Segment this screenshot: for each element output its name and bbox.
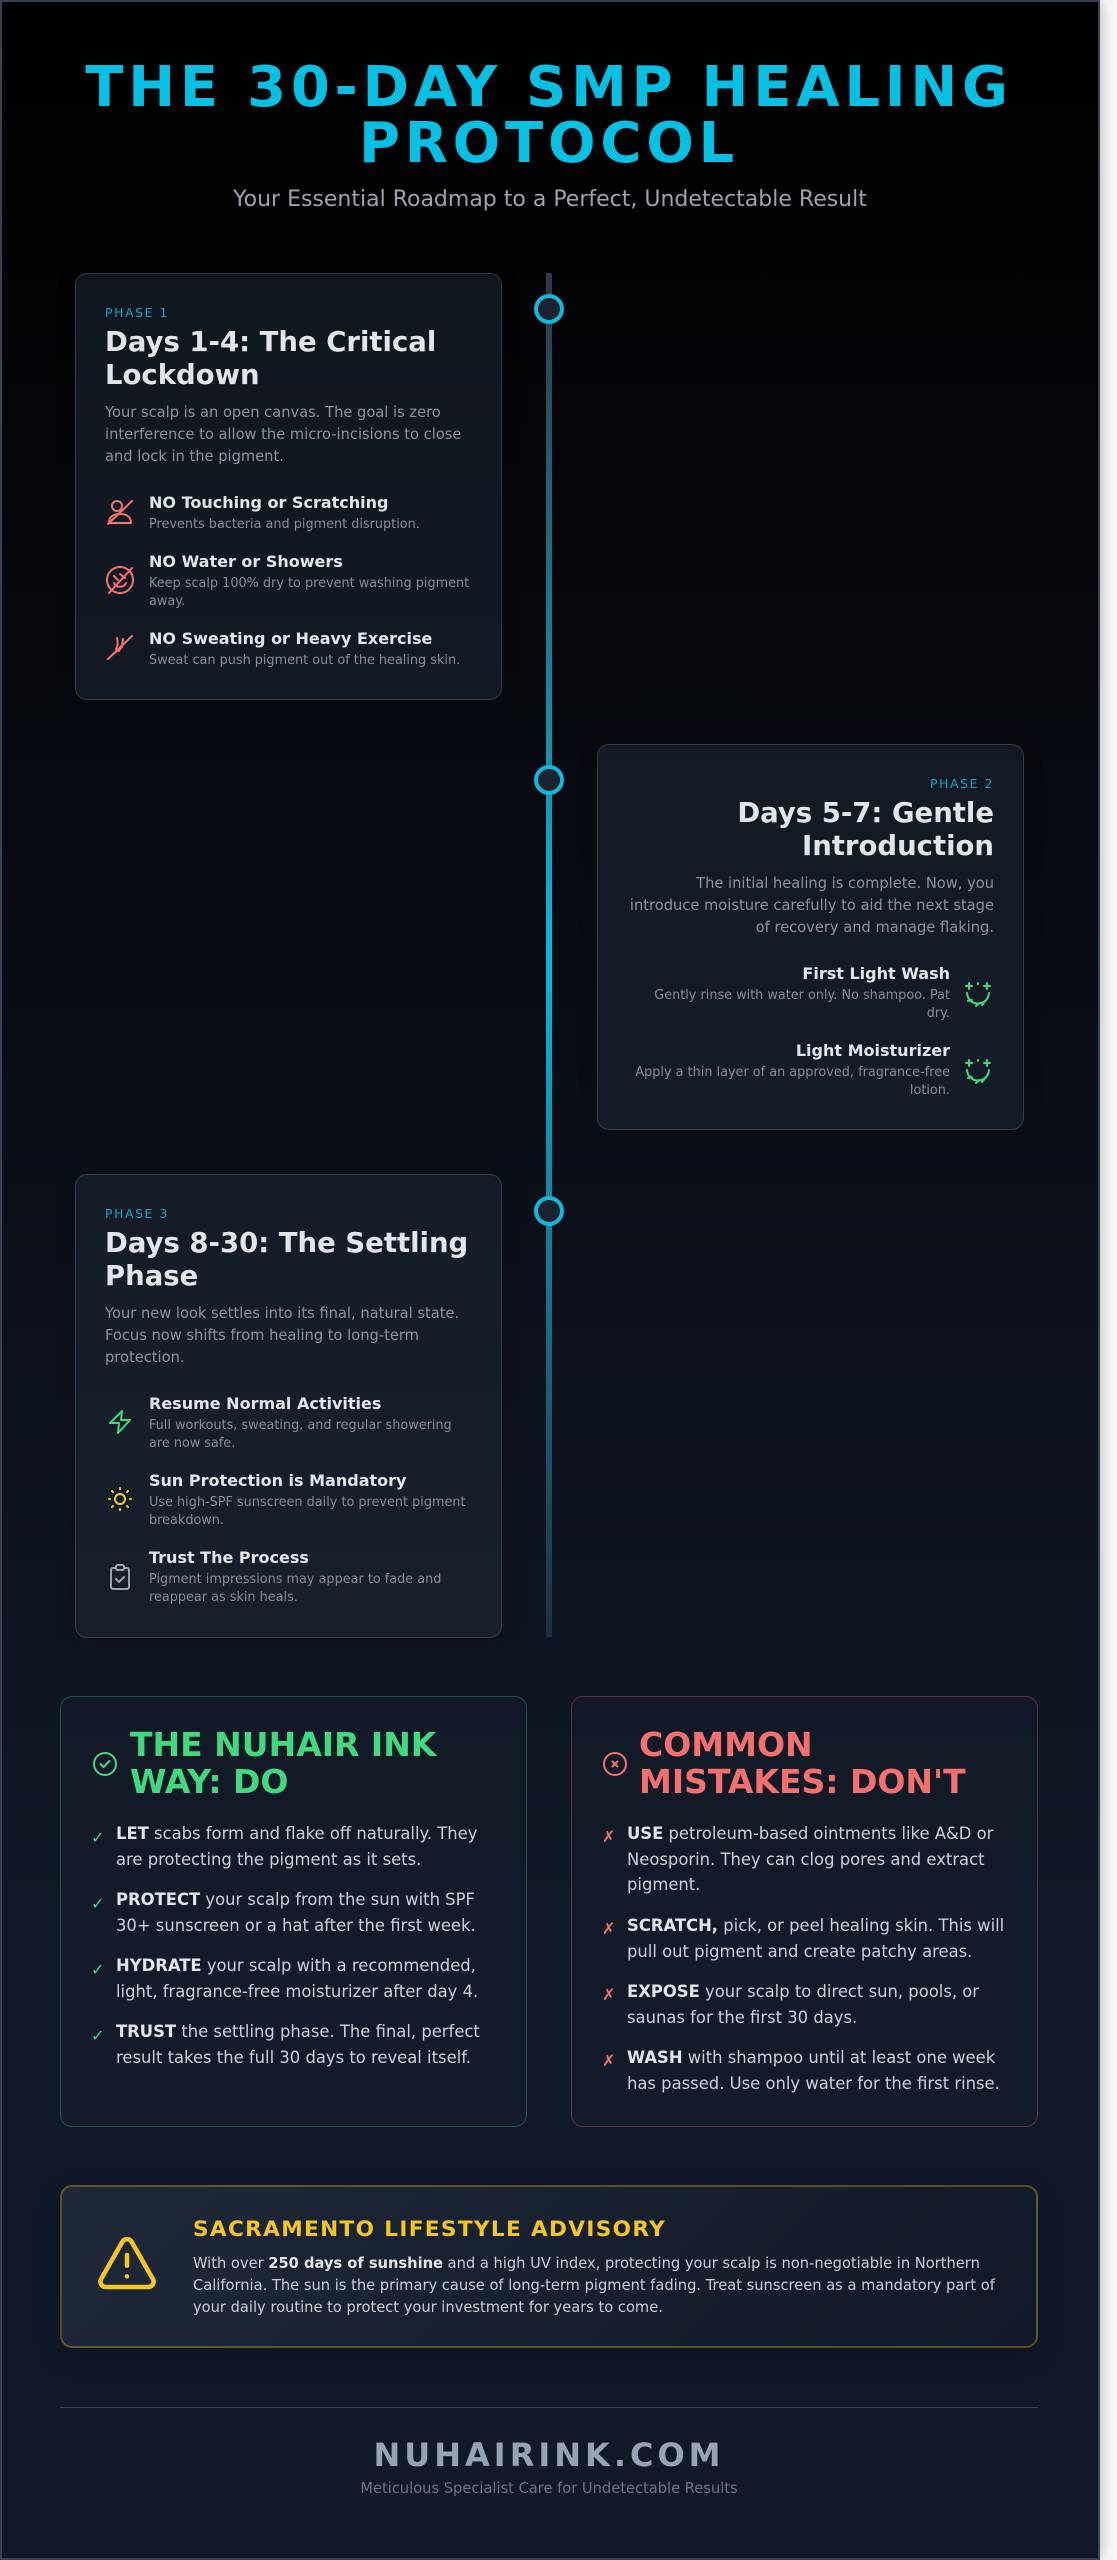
- don't item 1: USE petroleum-based ointments like A&D or: [627, 1824, 993, 1843]
- panel: phase 2: [597, 744, 1024, 1130]
- icon: x circle: [603, 1752, 627, 1776]
- do heading: [130, 1725, 438, 1801]
- item: no water: NO Water or Showers: [149, 552, 343, 571]
- phase 2 label: PHASE 2: [930, 776, 994, 791]
- do item 3: [116, 1956, 478, 2001]
- item: trust the process: Pigment impressions may appear to fade and: [149, 1572, 441, 1587]
- item: first light wash: First Light Wash: [802, 964, 950, 983]
- phase 2 heading: [737, 797, 994, 862]
- don't item 2: SCRATCH, pick, or peel healing skin. This will: [627, 1916, 1004, 1935]
- icon: clipboard check: [110, 1564, 130, 1590]
- phase 1 heading: [105, 326, 436, 391]
- item: no touching: Prevents bacteria and pigment disruption.: [149, 517, 420, 532]
- icon: no sweating: [107, 635, 133, 660]
- don't item 1: [627, 1824, 994, 1894]
- phase 1 heading: Days 1-4: The Critical: [105, 326, 436, 358]
- icon: check circle: [93, 1752, 117, 1776]
- phase 1 description: and lock in the pigment.: [105, 448, 284, 465]
- item: resume activities: are now safe.: [149, 1436, 235, 1451]
- don't cross 2: ✗: [602, 1919, 615, 1938]
- phase 3 description: Focus now shifts from healing to long-term: [105, 1327, 419, 1344]
- don't item 4: [627, 2048, 1000, 2093]
- do item 3: light, fragrance-free moisturizer after day 4.: [116, 1982, 478, 2001]
- do check 3: ✓: [91, 1960, 104, 1979]
- do item 1: are protecting the pigment as it sets.: [116, 1850, 421, 1869]
- title: PROTOCOL: [359, 111, 739, 176]
- title: THE 30-DAY SMP HEALING: [85, 55, 1013, 120]
- item: light moisturizer: lotion.: [910, 1083, 950, 1098]
- do item 4: [116, 2022, 480, 2067]
- icon: warning triangle: [98, 2236, 156, 2290]
- do heading: WAY: DO: [130, 1762, 288, 1801]
- item: no water: away.: [149, 594, 185, 609]
- do item 1: [116, 1824, 477, 1869]
- don't item 1: Neosporin. They can clog pores and extract: [627, 1850, 985, 1869]
- title: [85, 55, 1013, 176]
- advisory body: With over 250 days of sunshine and a high UV index, protecting your scalp is non-negotiable in Northern: [193, 2255, 980, 2272]
- don't item 2: [627, 1916, 1004, 1961]
- don't item 3: [627, 1982, 979, 2027]
- item: no sweating: [149, 629, 460, 668]
- subtitle: Your Essential Roadmap to a Perfect, Undetectable Result: [233, 187, 867, 212]
- item: sun protection: [149, 1471, 466, 1528]
- item: first light wash: dry.: [927, 1006, 950, 1021]
- panel: do list: [60, 1696, 527, 2127]
- do item 4: result takes the full 30 days to reveal itself.: [116, 2048, 471, 2067]
- do item 4: TRUST the settling phase. The final, perfect: [116, 2022, 480, 2041]
- item: no touching: NO Touching or Scratching: [149, 493, 389, 512]
- footer divider: [60, 2407, 1038, 2408]
- don't item 2: pull out pigment and create patchy areas.: [627, 1942, 972, 1961]
- don't item 3: saunas for the first 30 days.: [627, 2008, 857, 2027]
- timeline node 3: [534, 1196, 564, 1226]
- phase 3 heading: Phase: [105, 1260, 198, 1292]
- don't heading: [639, 1725, 966, 1801]
- do check 2: ✓: [91, 1894, 104, 1913]
- phase 2 description: of recovery and manage flaking.: [756, 919, 994, 936]
- don't item 1: pigment.: [627, 1875, 700, 1894]
- advisory body: California. The sun is the primary cause of long-term pigment fading. Treat sunscreen as a mandatory part of: [193, 2277, 995, 2294]
- don't cross 3: ✗: [602, 1985, 615, 2004]
- do heading: THE NUHAIR INK: [130, 1725, 436, 1764]
- item: no water: Keep scalp 100% dry to prevent washing pigment: [149, 576, 469, 591]
- do item 3: HYDRATE your scalp with a recommended,: [116, 1956, 476, 1975]
- phase 1 description: Your scalp is an open canvas. The goal is zero: [105, 404, 441, 421]
- do item 1: LET scabs form and flake off naturally. They: [116, 1824, 477, 1843]
- phase 1 description: [105, 404, 461, 465]
- phase 3 description: Your new look settles into its final, natural state.: [105, 1305, 459, 1322]
- do item 2: PROTECT your scalp from the sun with SPF: [116, 1890, 475, 1909]
- icon: sparkle smile 1: [965, 982, 991, 1007]
- item: trust the process: [149, 1548, 441, 1605]
- phase 3 description: protection.: [105, 1349, 185, 1366]
- panel: phase 1: [75, 273, 502, 700]
- icon: sparkle smile 2: [965, 1059, 991, 1084]
- item: resume activities: Resume Normal Activities: [149, 1394, 381, 1413]
- item: trust the process: reappear as skin heals.: [149, 1590, 298, 1605]
- item: no touching: [149, 493, 420, 532]
- icon: no water: [106, 566, 134, 594]
- don't item 4: WASH with shampoo until at least one week: [627, 2048, 995, 2067]
- phase 2 heading: Days 5-7: Gentle: [737, 797, 994, 829]
- footer brand: NUHAIRINK.COM: [373, 2436, 725, 2474]
- timeline line: [546, 273, 552, 1637]
- phase 1 description: interference to allow the micro-incisions to close: [105, 426, 461, 443]
- phase 3 description: [105, 1305, 459, 1366]
- item: light moisturizer: Apply a thin layer of an approved, fragrance-free: [635, 1065, 950, 1080]
- icon: no touching: [107, 500, 133, 525]
- item: sun protection: Use high-SPF sunscreen daily to prevent pigment: [149, 1495, 466, 1510]
- item: sun protection: Sun Protection is Mandatory: [149, 1471, 406, 1490]
- item: no sweating: NO Sweating or Heavy Exercise: [149, 629, 432, 648]
- do check 1: ✓: [91, 1828, 104, 1847]
- phase 3 label: PHASE 3: [105, 1206, 169, 1221]
- advisory body: [193, 2255, 996, 2316]
- item: light moisturizer: [635, 1041, 950, 1098]
- icon: sun: [108, 1487, 132, 1511]
- phase 2 description: [630, 875, 994, 936]
- item: no water: [149, 552, 469, 609]
- footer tagline: Meticulous Specialist Care for Undetectable Results: [360, 2480, 738, 2497]
- do item 2: [116, 1890, 476, 1935]
- phase 3 heading: Days 8-30: The Settling: [105, 1227, 468, 1259]
- don't heading: MISTAKES: DON'T: [639, 1762, 966, 1801]
- item: trust the process: Trust The Process: [149, 1548, 309, 1567]
- phase 2 heading: Introduction: [802, 830, 994, 862]
- phase 1 label: PHASE 1: [105, 305, 169, 320]
- don't item 4: has passed. Use only water for the first rinse.: [627, 2074, 1000, 2093]
- item: light moisturizer: Light Moisturizer: [796, 1041, 950, 1060]
- don't heading: COMMON: [639, 1725, 813, 1764]
- do item 2: 30+ sunscreen or a hat after the first week.: [116, 1916, 476, 1935]
- advisory heading: SACRAMENTO LIFESTYLE ADVISORY: [193, 2217, 666, 2242]
- item: sun protection: breakdown.: [149, 1513, 224, 1528]
- panel: phase 3: [75, 1174, 502, 1638]
- phase 2 description: introduce moisture carefully to aid the next stage: [630, 897, 994, 914]
- item: resume activities: Full workouts, sweating, and regular showering: [149, 1418, 452, 1433]
- phase 1 heading: Lockdown: [105, 359, 260, 391]
- panel: don't list: [571, 1696, 1038, 2127]
- timeline node 1: [534, 294, 564, 324]
- item: first light wash: Gently rinse with water only. No shampoo. Pat: [654, 988, 950, 1003]
- advisory body: your daily routine to protect your investment for years to come.: [193, 2299, 663, 2316]
- do check 4: ✓: [91, 2026, 104, 2045]
- don't cross 4: ✗: [602, 2051, 615, 2070]
- item: first light wash: [654, 964, 950, 1021]
- phase 3 heading: [105, 1227, 468, 1292]
- icon: lightning: [109, 1410, 131, 1434]
- phase 2 description: The initial healing is complete. Now, you: [696, 875, 994, 892]
- callout: advisory: [60, 2185, 1038, 2348]
- don't cross 1: ✗: [602, 1827, 615, 1846]
- don't item 3: EXPOSE your scalp to direct sun, pools, or: [627, 1982, 979, 2001]
- item: no sweating: Sweat can push pigment out of the healing skin.: [149, 653, 460, 668]
- item: resume activities: [149, 1394, 452, 1451]
- timeline node 2: [534, 765, 564, 795]
